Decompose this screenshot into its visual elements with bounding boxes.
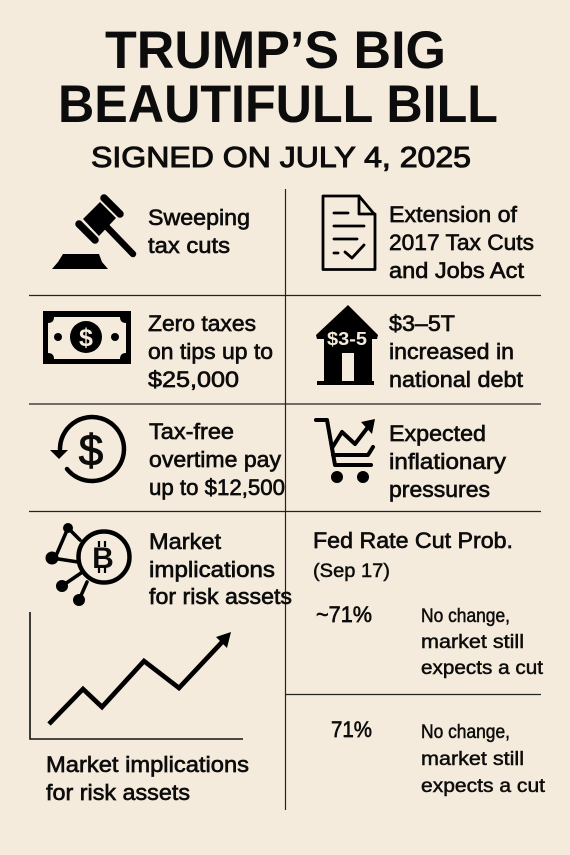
text: zero taxes: $25,000 bbox=[148, 367, 239, 392]
icon: bitcoin network: B bbox=[92, 542, 114, 575]
icon: banknote: $ bbox=[79, 324, 93, 352]
icon: document with check bbox=[323, 196, 375, 270]
text: debt: increased in bbox=[389, 339, 514, 364]
text: extension: 2017 Tax Cuts bbox=[389, 230, 534, 255]
panel: extension of tax cuts act bbox=[323, 196, 534, 283]
text: inflation: inflationary bbox=[389, 449, 506, 474]
stat: approx 71 percent: ~71% bbox=[316, 602, 372, 627]
subtitle: SIGNED ON JULY 4, 2025 bbox=[91, 142, 471, 174]
chart caption: Market implications bbox=[46, 752, 249, 777]
text: debt: $3–5T bbox=[389, 311, 455, 336]
panel: market implications bbox=[46, 523, 292, 609]
stat: 71 percent bbox=[331, 717, 546, 797]
text: debt: national debt bbox=[389, 367, 523, 392]
icon: dollar with return arrow bbox=[50, 417, 124, 481]
stat: 71 percent: market still bbox=[421, 748, 524, 770]
text: extension: and Jobs Act bbox=[389, 258, 524, 283]
icon: dollar with return arrow: $ bbox=[79, 426, 103, 475]
text: market implications: implications bbox=[149, 557, 275, 582]
icon: cart with rising line bbox=[316, 419, 375, 483]
text: zero taxes bbox=[148, 311, 273, 392]
panel: fed rate cut probability bbox=[313, 528, 546, 797]
panel: zero taxes on tips bbox=[43, 311, 273, 392]
text: inflation: Expected bbox=[389, 421, 486, 446]
text: zero taxes: on tips up to bbox=[148, 339, 273, 364]
text: overtime: overtime pay bbox=[149, 447, 281, 472]
panel: national debt bbox=[316, 305, 523, 392]
text: extension: Extension of bbox=[389, 202, 518, 227]
title: BEAUTIFULL BILL bbox=[58, 75, 498, 134]
stat: approx 71 percent: No change, bbox=[421, 605, 510, 627]
icon: bitcoin network bbox=[46, 523, 130, 606]
stat: approx 71 percent: expects a cut bbox=[421, 657, 544, 679]
heading: fed rate cut: Fed Rate Cut Prob. bbox=[313, 528, 513, 553]
icon: banknote bbox=[43, 311, 131, 364]
chart caption bbox=[46, 752, 249, 805]
text: debt bbox=[389, 311, 523, 392]
icon: house: $3-5 bbox=[327, 329, 367, 349]
stat: 71 percent: No change, bbox=[421, 721, 510, 743]
stat: approx 71 percent: market still bbox=[421, 631, 524, 653]
chart: rising market line bbox=[30, 612, 243, 739]
panel: sweeping tax cuts bbox=[52, 198, 250, 269]
text: sweeping tax cuts bbox=[148, 205, 250, 258]
heading: fed rate cut: (Sep 17) bbox=[313, 560, 390, 582]
text: inflation bbox=[389, 421, 506, 502]
text: overtime bbox=[149, 419, 285, 500]
stat: 71 percent: 71% bbox=[331, 717, 372, 742]
text: zero taxes: Zero taxes bbox=[148, 311, 256, 336]
text: market implications: for risk assets bbox=[149, 584, 292, 609]
panel: inflationary pressures bbox=[316, 419, 506, 502]
text: sweeping tax cuts: Sweeping bbox=[148, 205, 250, 230]
icon: gavel bbox=[52, 198, 133, 269]
heading: fed rate cut bbox=[313, 528, 513, 582]
icon: house bbox=[316, 305, 378, 385]
text: overtime: Tax-free bbox=[149, 419, 234, 444]
title: TRUMP’S BIG bbox=[105, 21, 446, 80]
text: inflation: pressures bbox=[389, 477, 490, 502]
stat: 71 percent: expects a cut bbox=[421, 775, 546, 797]
stat: approx 71 percent bbox=[316, 602, 544, 679]
text: extension bbox=[389, 202, 534, 283]
text: market implications: Market bbox=[149, 529, 221, 554]
chart caption: for risk assets bbox=[46, 780, 190, 805]
title bbox=[58, 21, 498, 134]
text: sweeping tax cuts: tax cuts bbox=[148, 233, 230, 258]
text: market implications bbox=[149, 529, 292, 609]
panel: tax-free overtime bbox=[50, 417, 285, 500]
text: overtime: up to $12,500 bbox=[149, 475, 285, 500]
